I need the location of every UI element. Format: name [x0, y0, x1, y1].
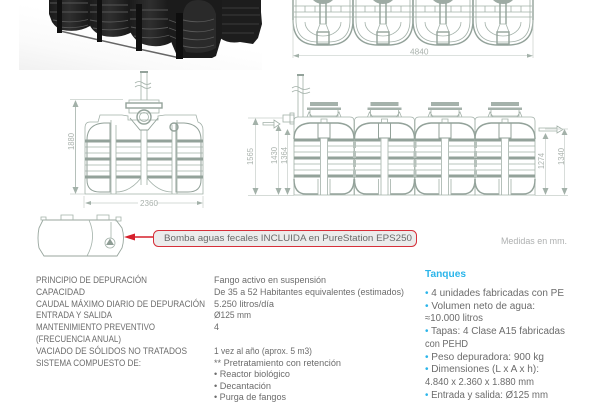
- note: measurements in mm: Medidas en mm.: [501, 236, 567, 246]
- dimension: 1430: 1430: [270, 146, 279, 164]
- spec values column: 5.250 litros/día: [214, 299, 274, 309]
- spec labels column: [36, 275, 205, 368]
- tank specification list: • 4 unidades fabricadas con PE: [425, 288, 564, 299]
- spec labels column: PRINCIPIO DE DEPURACIÓN: [36, 275, 147, 285]
- dimension: 1880: 1880: [67, 132, 76, 150]
- spec labels column: VACIADO DE SÓLIDOS NO TRATADOS: [36, 346, 187, 356]
- photo: black tanks of the treatment plant: [19, 0, 262, 70]
- small tank with fecal water pump: [38, 215, 124, 256]
- manhole and riser: [126, 71, 178, 131]
- spec labels column: CAUDAL MÁXIMO DIARIO DE DEPURACIÓN: [36, 299, 205, 309]
- spec labels column: SISTEMA COMPUESTO DE:: [36, 358, 141, 368]
- spec values column: ** Pretratamiento con retención: [214, 358, 341, 368]
- tank specification list: • Volumen neto de agua:: [425, 301, 535, 312]
- dimension: 1364: 1364: [280, 146, 289, 164]
- tank specification list: [425, 288, 565, 401]
- dimension: 1340: 1340: [557, 147, 566, 165]
- tank 1: [49, 0, 90, 33]
- rear tank: [220, 0, 262, 44]
- spec values column: [214, 275, 404, 402]
- tank 4: [168, 0, 222, 59]
- tank specification list: ≈10.000 litros: [425, 313, 483, 324]
- spec values column: • Purga de fangos: [214, 392, 287, 402]
- dimension: 1274: 1274: [537, 153, 546, 169]
- tank specification list: • Tapas: 4 Clase A15 fabricadas: [425, 326, 565, 337]
- outlet arrow: [539, 126, 563, 133]
- spec values column: • Decantación: [214, 381, 271, 391]
- spec values column: Ø125 mm: [214, 310, 251, 320]
- tank specification list: • Dimensiones (L x A x h):: [425, 364, 539, 375]
- tank 3: [128, 0, 172, 51]
- callout: pump included: Bomba aguas fecales INCLUIDA en PureStation EPS250: [164, 233, 412, 244]
- heading: Tanques: Tanques: [425, 268, 466, 280]
- spec values column: Fango activo en suspensión: [214, 275, 326, 285]
- inlet arrow: [263, 120, 280, 128]
- dimension: 2360: 2360: [140, 199, 159, 208]
- callout: pump included: [124, 230, 416, 246]
- side view drawing with height dimensions: [246, 74, 568, 196]
- tank specification list: • Entrada y salida: Ø125 mm: [425, 390, 548, 401]
- tank specification list: con PEHD: [425, 339, 468, 350]
- spec labels column: CAPACIDAD: [36, 287, 85, 297]
- front view drawing with 1880 and 2360 dimensions: [67, 71, 203, 208]
- plan view drawing with 4840 dimension: [293, 0, 533, 58]
- tank specification list: • Peso depuradora: 900 kg: [425, 352, 544, 363]
- spec values column: 4: [214, 322, 219, 332]
- spec values column: 1 vez al año (aprox. 5 m3): [214, 346, 312, 356]
- vent pipe: [283, 74, 310, 124]
- tank 2: [88, 0, 132, 42]
- tank specification list: 4.840 x 2.360 x 1.880 mm: [425, 377, 534, 388]
- dimension: 4840: 4840: [410, 48, 429, 56]
- base rails: [60, 31, 180, 58]
- dimension: 1565: 1565: [246, 147, 255, 165]
- spec labels column: ENTRADA Y SALIDA: [36, 310, 112, 320]
- spec labels column: (FRECUENCIA ANUAL): [36, 334, 121, 344]
- spec labels column: MANTENIMIENTO PREVENTIVO: [36, 322, 155, 332]
- spec values column: • Reactor biológico: [214, 369, 290, 379]
- spec values column: De 35 a 52 Habitantes equivalentes (estimados): [214, 287, 404, 297]
